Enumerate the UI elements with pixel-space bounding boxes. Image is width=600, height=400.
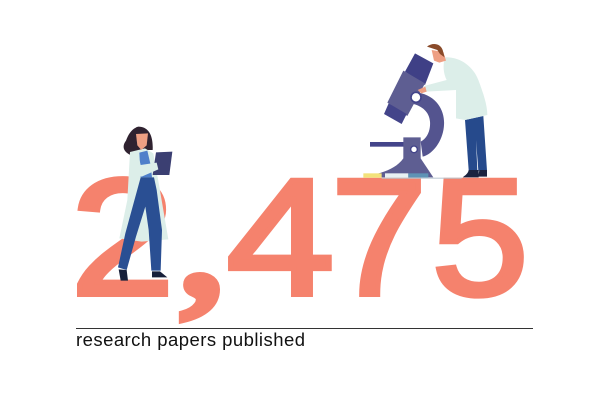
coat <box>119 148 168 242</box>
big number 2,475: 4 <box>226 145 335 330</box>
hair <box>124 127 153 156</box>
big number 2,475 <box>70 145 529 331</box>
scientist with clipboard <box>118 127 172 281</box>
microscope <box>363 53 462 179</box>
big number 2,475: 7 <box>331 145 427 330</box>
scientist with microscope <box>363 44 487 179</box>
shirt <box>139 151 152 177</box>
divider line <box>76 328 533 329</box>
big number 2,475: 5 <box>432 145 529 331</box>
man <box>418 44 487 177</box>
shoes <box>119 269 167 281</box>
pants <box>118 177 162 271</box>
big number 2,475: 2 <box>70 145 175 330</box>
coat sleeve <box>130 152 158 177</box>
big number 2,475: , <box>180 163 223 329</box>
clipboard <box>153 152 172 175</box>
face <box>136 133 148 150</box>
caption: research papers published <box>76 329 305 350</box>
